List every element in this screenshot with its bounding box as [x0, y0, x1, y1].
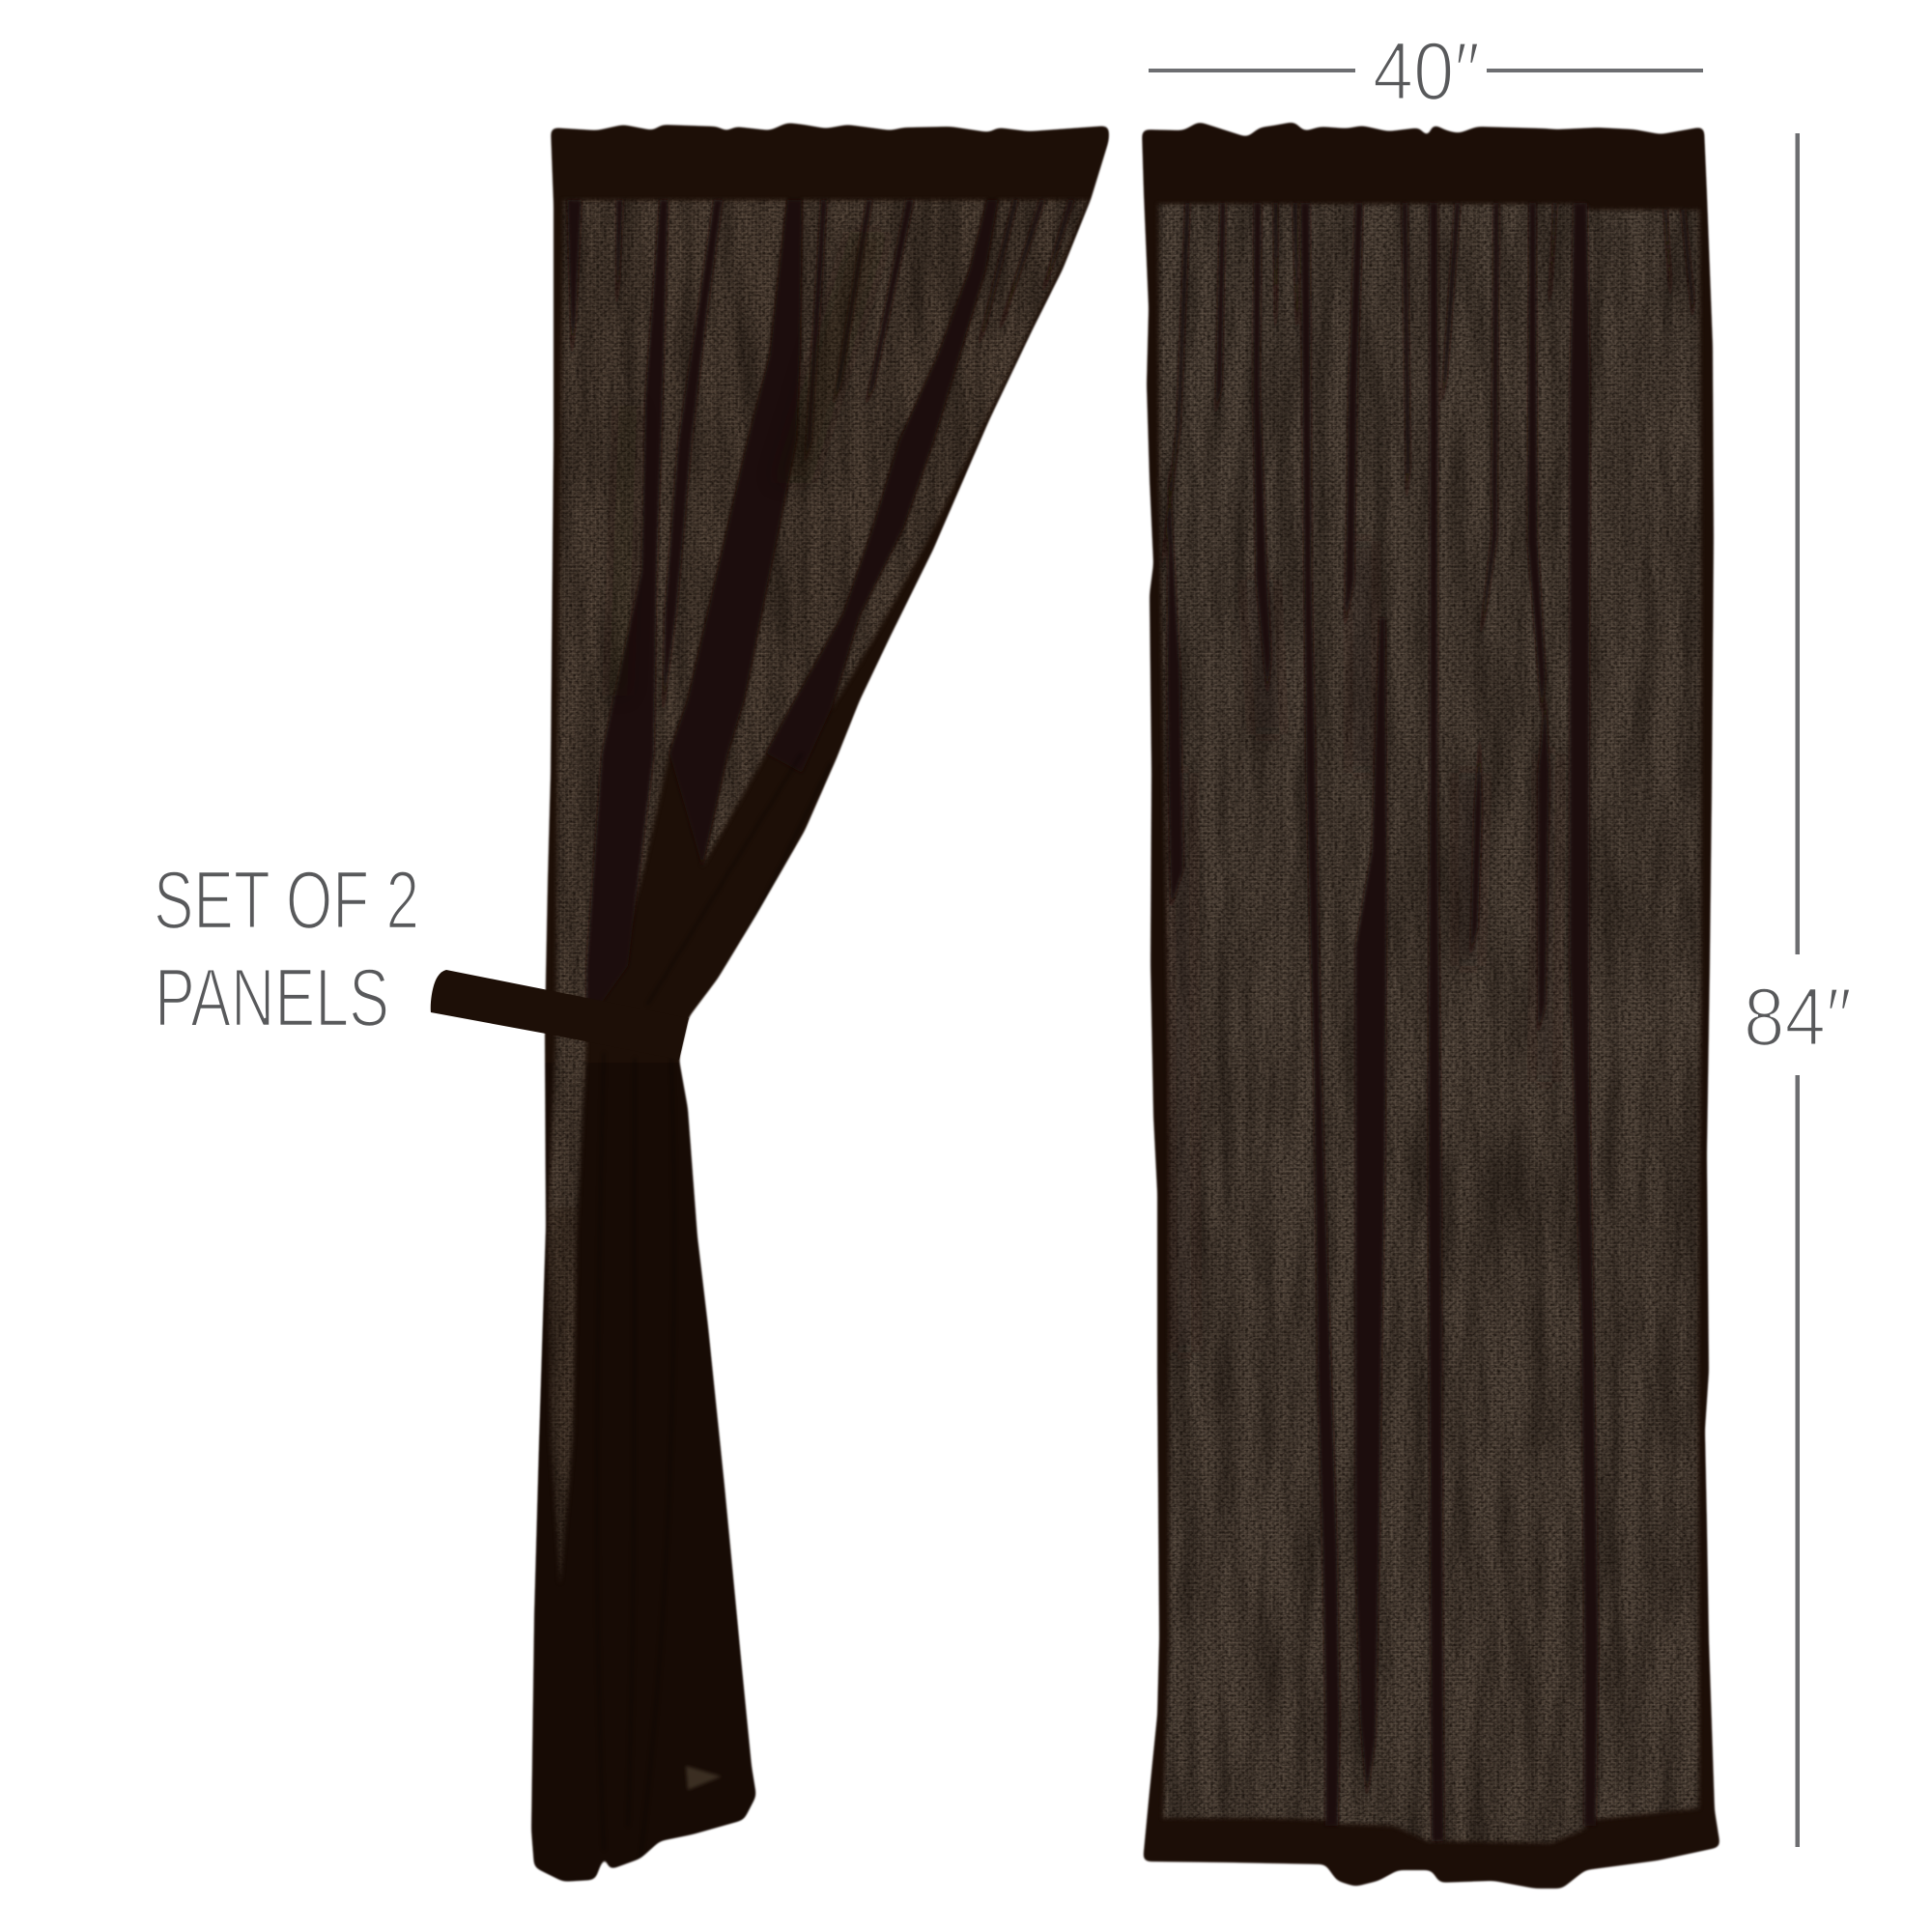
- width dimension: 40 inches: 40″: [1373, 26, 1480, 118]
- right curtain soft shadows: [1174, 541, 1557, 1352]
- left curtain sheer fabric: [541, 193, 1101, 1594]
- height dimension: 84 inches: [1744, 133, 1852, 1847]
- left curtain fold lines below tie: [597, 753, 831, 1859]
- left curtain folds: [567, 200, 1074, 1024]
- left curtain hem triangle: [686, 1766, 722, 1790]
- left curtain panel (tied back): [522, 116, 1121, 1893]
- label: set of 2 panels: SET OF 2: [154, 855, 419, 947]
- tie-back belt: [431, 970, 689, 1060]
- right curtain panel: [1130, 116, 1729, 1893]
- label: set of 2 panels: [154, 855, 419, 1044]
- left curtain soft shadow: [609, 232, 889, 696]
- right curtain dark fabric: [1130, 116, 1729, 1893]
- right curtain sheer fabric: [1150, 198, 1710, 1850]
- width dimension: 40 inches: [1149, 26, 1703, 118]
- right curtain folds: [1160, 203, 1694, 1841]
- label: set of 2 panels: PANELS: [155, 952, 389, 1044]
- left curtain dark fabric: [522, 116, 1121, 1893]
- height dimension: 84 inches: 84″: [1744, 972, 1852, 1064]
